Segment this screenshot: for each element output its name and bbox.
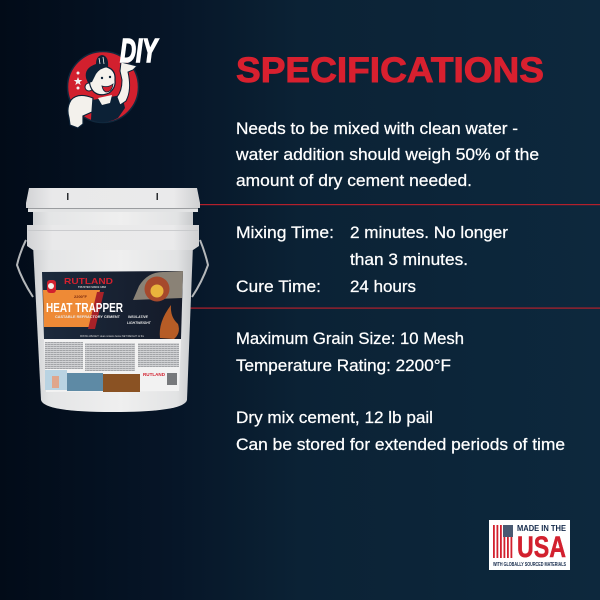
label net weight line: MIXING WEIGHT: Heat contains below NET WEIGHT 12 lbs (80, 334, 145, 338)
eyes (101, 76, 111, 79)
label product name: HEAT TRAPPER (46, 300, 123, 315)
label features: LIGHTWEIGHT (127, 321, 152, 325)
packaging and storage: Can be stored for extended periods of time (236, 436, 565, 454)
label features: INSULATIVE (128, 315, 149, 319)
label brand text: RUTLAND (64, 276, 113, 286)
intro text: water addition should weigh 50% of the (235, 146, 539, 164)
stars (74, 72, 82, 90)
grain size and temperature: Temperature Rating: 2200°F (236, 357, 451, 375)
grain size and temperature (236, 330, 464, 375)
product: cement pail (17, 188, 208, 412)
packaging and storage (236, 409, 565, 454)
made in the text: MADE IN THE (517, 524, 567, 533)
lid (26, 188, 200, 208)
label small logo: RUTLAND (143, 372, 166, 377)
left sleeve and fist (68, 95, 93, 128)
pail handle (17, 240, 208, 297)
label subtitle: CASTABLE REFRACTORY CEMENT (55, 315, 121, 319)
USA text: USA (517, 531, 566, 564)
label qr code (167, 373, 177, 385)
label tagline: TRUSTED SINCE 1883 (78, 285, 107, 289)
label red stripe (88, 292, 104, 329)
intro text (235, 120, 539, 190)
label fine print (45, 342, 179, 371)
divider lines (190, 204, 600, 309)
hair highlights (99, 57, 104, 64)
mixing and cure times (236, 224, 509, 296)
label features (127, 315, 152, 325)
label photos (45, 370, 140, 392)
intro text: Needs to be mixed with clean water - (236, 120, 518, 138)
heading: SPECIFICATIONS (236, 51, 544, 90)
smile (102, 84, 113, 92)
badge: made in the USA (489, 520, 570, 570)
logo: DIY mascot (68, 32, 159, 128)
grain size and temperature: Maximum Grain Size: 10 Mesh (236, 330, 464, 348)
mixing and cure times: 24 hours (350, 278, 416, 296)
ear (85, 83, 93, 91)
intro text: amount of dry cement needed. (236, 172, 472, 190)
mixing and cure times: Mixing Time: (236, 224, 334, 242)
flag stripes (493, 525, 512, 558)
label dark panel (42, 271, 183, 339)
red circle badge (68, 52, 138, 122)
label orange band (43, 290, 100, 327)
mixing and cure times: Cure Time: (236, 278, 321, 296)
bib collar (98, 95, 112, 105)
flag canton (503, 525, 513, 537)
sourcing text: WITH GLOBALLY SOURCED MATERIALS (493, 562, 566, 568)
pail body (33, 245, 193, 412)
oven image (133, 271, 183, 300)
mixing and cure times: than 3 minutes. (350, 251, 468, 269)
flame (160, 305, 179, 339)
hair (86, 55, 108, 83)
mixing and cure times: 2 minutes. No longer (350, 224, 509, 242)
mascot on label (47, 280, 56, 293)
upper body (33, 208, 193, 248)
DIY text: DIY (120, 32, 159, 69)
raised arm and hand (117, 62, 137, 105)
packaging and storage: Dry mix cement, 12 lb pail (236, 409, 433, 427)
overalls (91, 95, 125, 122)
label temperature: 2200°F (74, 294, 87, 299)
head (90, 66, 115, 95)
pail ring (27, 225, 199, 250)
label white section (44, 339, 181, 392)
